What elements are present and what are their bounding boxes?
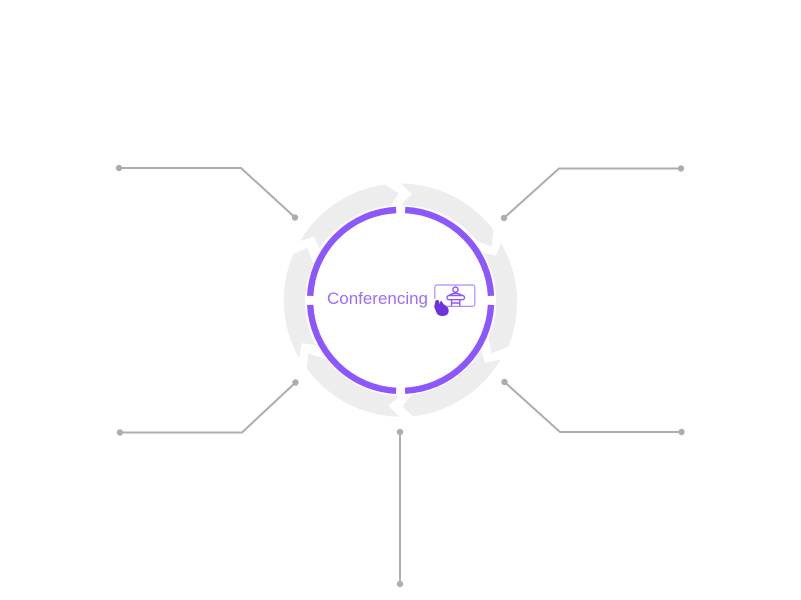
purple segmented ring bbox=[310, 210, 491, 391]
icon: pointer hand bbox=[434, 300, 449, 316]
grey arrow ring bbox=[284, 184, 517, 417]
icon: person at desk bbox=[447, 287, 464, 306]
arrow segment: right bbox=[483, 243, 517, 353]
arrow segment: top left bbox=[300, 185, 399, 248]
connector: bottom right bbox=[501, 379, 685, 435]
icon: conferencing click bbox=[434, 285, 475, 316]
title: Conferencing: Conferencing bbox=[327, 289, 428, 308]
arrow segment: bottom right bbox=[402, 350, 501, 416]
icon frame bbox=[435, 285, 475, 306]
connector: bottom left bbox=[117, 379, 299, 436]
arrow segment: left bbox=[284, 248, 316, 358]
arrow segment: bottom left bbox=[307, 354, 400, 417]
connector: bottom centre bbox=[397, 429, 403, 587]
connector: top left bbox=[116, 165, 298, 221]
white centre disc bbox=[306, 206, 495, 395]
arrow segment: top right bbox=[401, 184, 494, 247]
connector: top right bbox=[501, 165, 684, 221]
